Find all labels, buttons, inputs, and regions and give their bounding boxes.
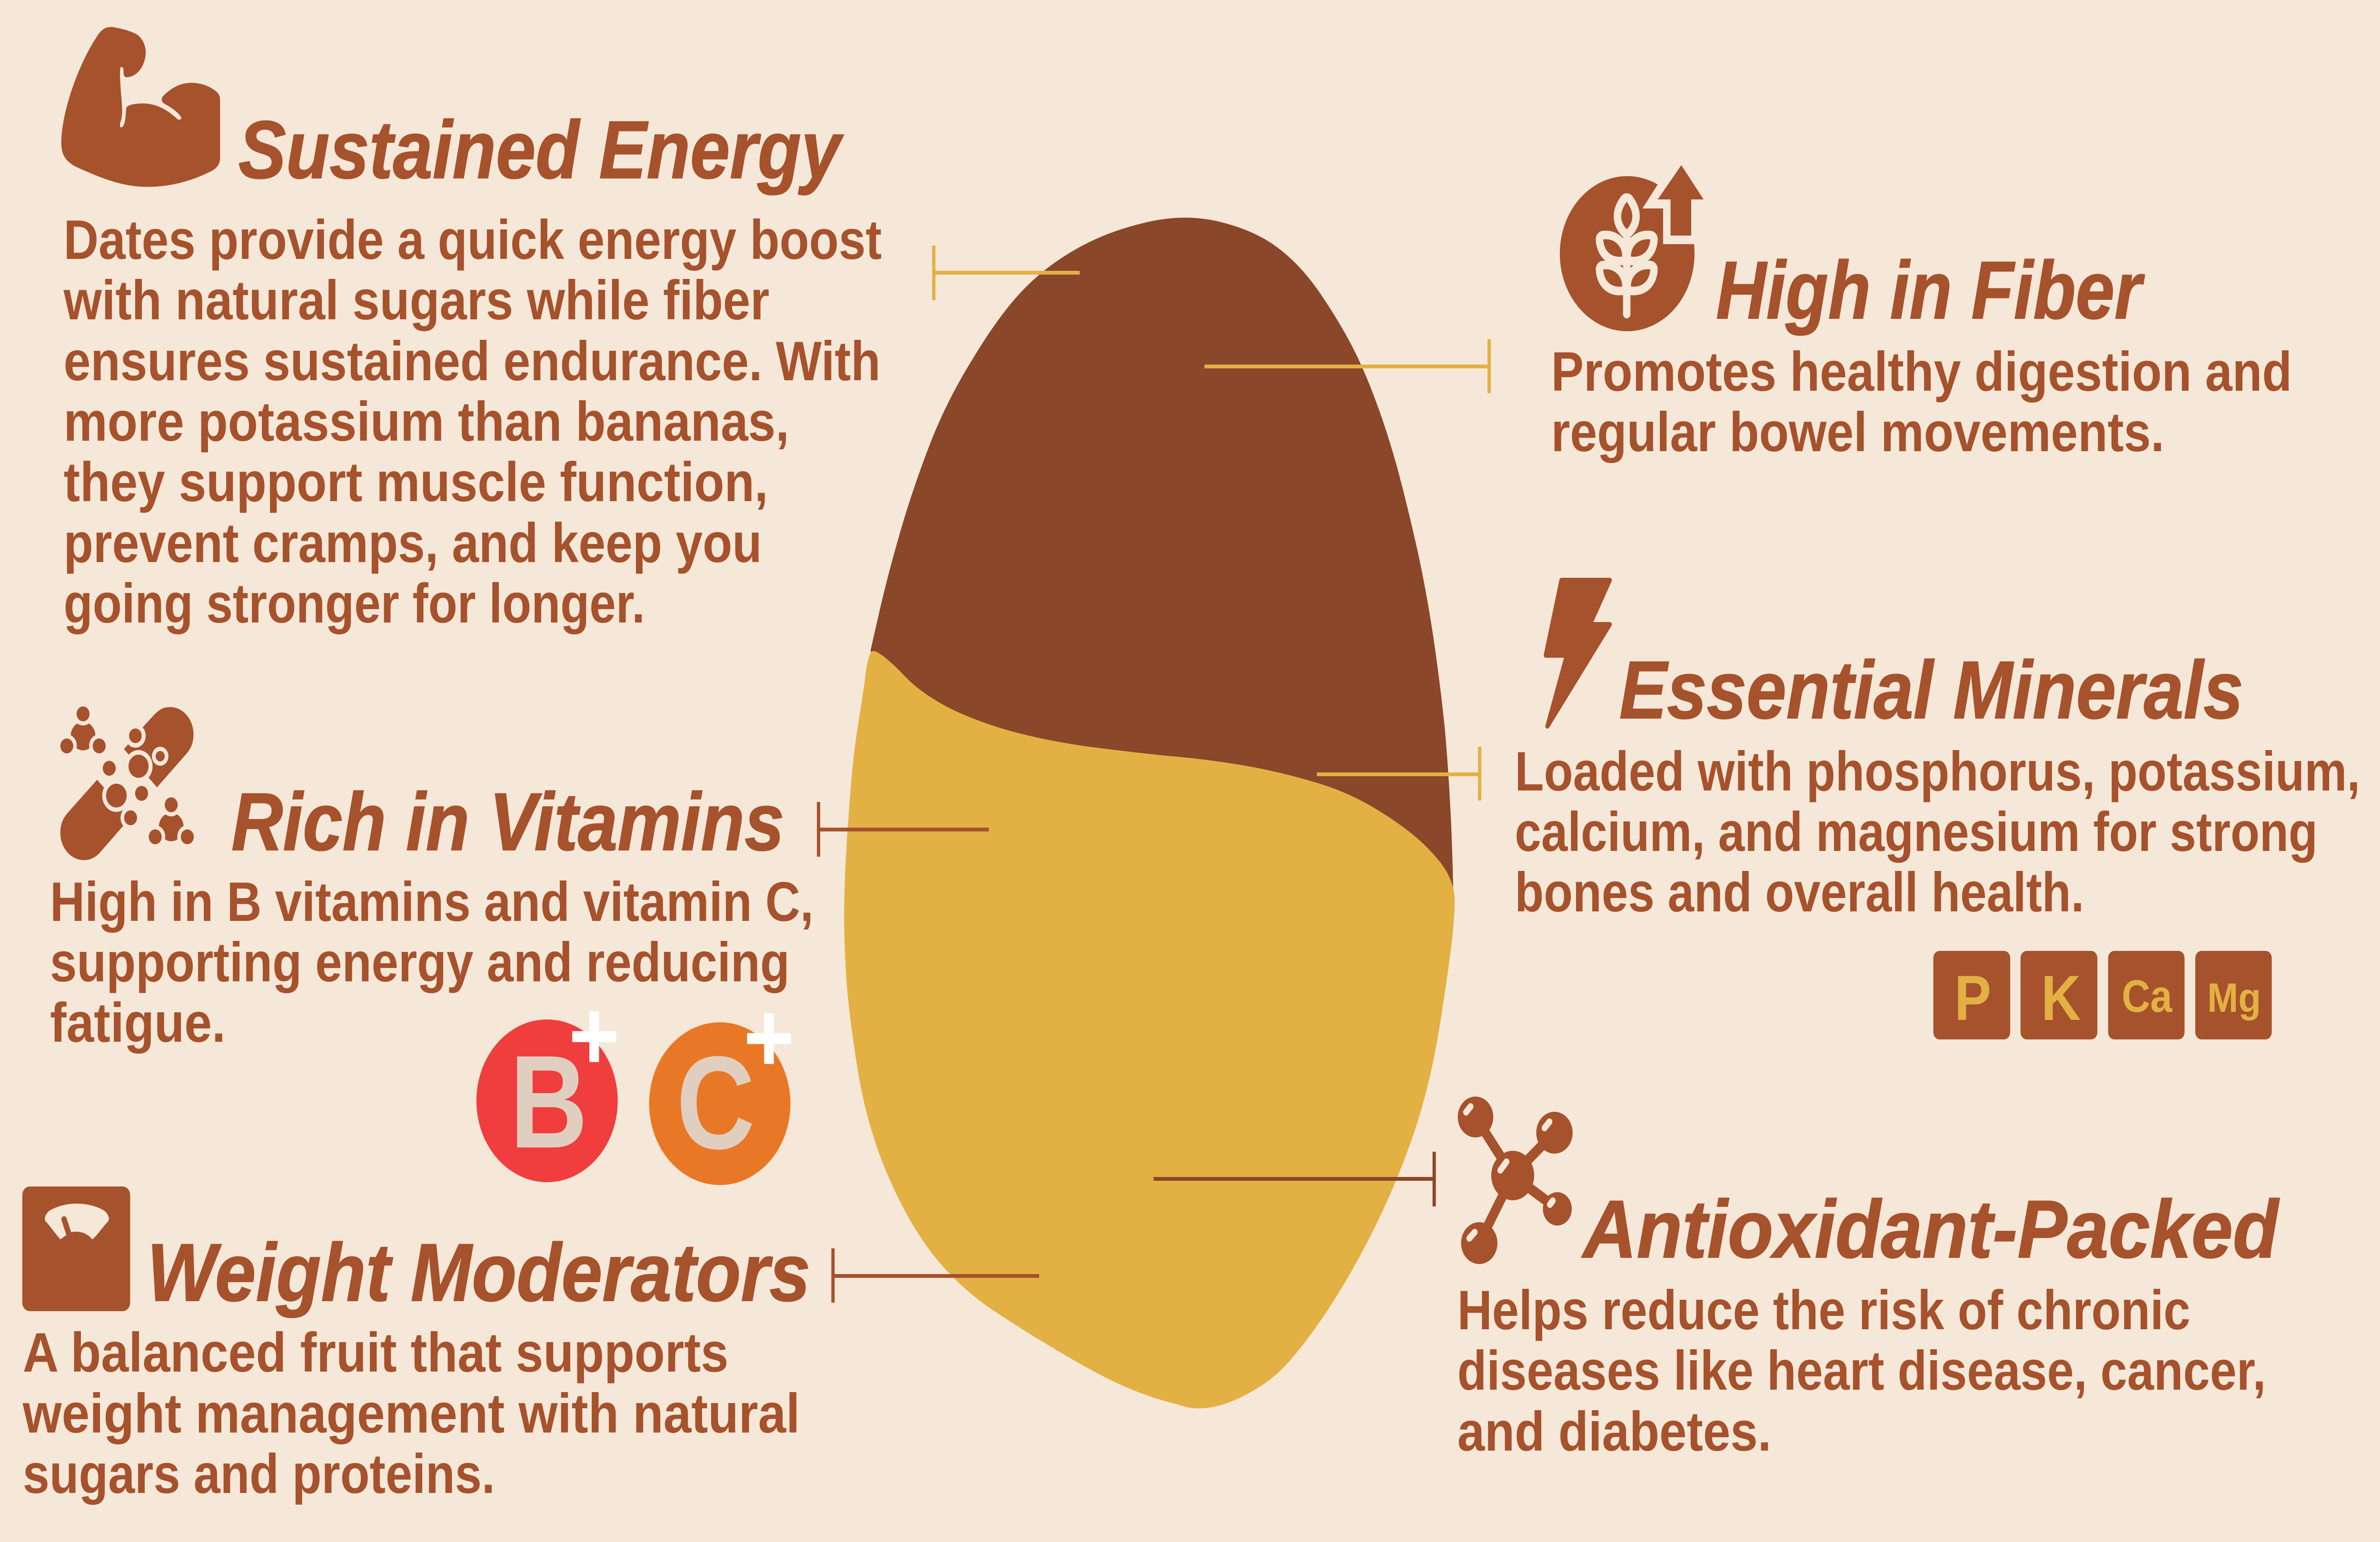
badge: vitamin C: + [742, 981, 793, 1093]
leader line: rich in vitamins [819, 802, 989, 857]
text block: rich in vitamins [50, 871, 813, 1054]
text block: rich in vitamins: fatigue. [50, 992, 226, 1054]
icon: wheat with up arrow [1560, 162, 1704, 331]
heading: rich in vitamins: Rich in Vitamins [231, 776, 784, 868]
badge: vitamin C [649, 981, 793, 1185]
text block: rich in vitamins: supporting energy and reducing [50, 931, 790, 994]
mineral badge: Mg: Mg [2207, 975, 2261, 1021]
leader line: weight moderators [833, 1248, 1039, 1303]
mineral badge: Ca: Ca [2122, 971, 2172, 1022]
text block: antioxidant-packed: diseases like heart disease, cancer, [1458, 1340, 2266, 1402]
icon: lightning bolt [1546, 580, 1610, 726]
heading: antioxidant-packed: Antioxidant-Packed [1581, 1184, 2280, 1275]
badge: vitamin B: B [510, 1028, 587, 1176]
heading: weight moderators: Weight Moderators [147, 1227, 810, 1318]
mineral badge: P [1934, 951, 2010, 1039]
date fruit illustration [844, 217, 1455, 1408]
panel: antioxidant-packed [1458, 1097, 2280, 1463]
text block: sustained energy: prevent cramps, and keep you [64, 512, 762, 574]
text block: high in fiber: Promotes healthy digestion and [1551, 341, 2292, 403]
leader line: high in fiber [1204, 339, 1489, 393]
text block: antioxidant-packed: Helps reduce the risk of chronic [1458, 1279, 2191, 1342]
panel: high in fiber [1551, 162, 2292, 464]
leader line: sustained energy [934, 246, 1080, 300]
text block: sustained energy [63, 209, 882, 635]
leader line: antioxidant-packed [1154, 1152, 1434, 1206]
mineral badge: K: K [2041, 962, 2081, 1034]
text block: rich in vitamins: High in B vitamins and vitamin C, [50, 871, 813, 933]
text block: sustained energy: Dates provide a quick energy boost [64, 209, 882, 271]
leader line: essential minerals [1317, 747, 1480, 801]
heading: high in fiber: High in Fiber [1716, 245, 2145, 336]
icon: flexed muscle [61, 27, 220, 187]
text block: sustained energy: they support muscle function, [64, 451, 768, 514]
mineral badge: P: P [1954, 962, 1991, 1034]
text block: antioxidant-packed [1458, 1279, 2266, 1463]
icon: capsule with bubbles [57, 702, 198, 860]
mineral badge: Mg [2195, 951, 2272, 1039]
badge: vitamin B [476, 979, 618, 1182]
mineral badge: K [2021, 951, 2097, 1039]
text block: high in fiber [1551, 341, 2292, 464]
text block: sustained energy: going stronger for longer. [64, 573, 645, 635]
heading: essential minerals: Essential Minerals [1619, 644, 2243, 736]
text block: essential minerals: Loaded with phosphorus, potassium, [1515, 741, 2360, 803]
text block: high in fiber: regular bowel movements. [1551, 401, 2164, 464]
text block: sustained energy: with natural sugars while fiber [63, 269, 769, 332]
text block: weight moderators: weight management with natural [22, 1383, 800, 1445]
icon: molecule [1458, 1097, 1573, 1264]
text block: sustained energy: more potassium than bananas, [64, 391, 789, 453]
panel: weight moderators [22, 1186, 810, 1505]
text block: essential minerals [1515, 741, 2360, 924]
mineral badge: Ca [2108, 951, 2184, 1039]
text block: essential minerals: bones and overall health. [1515, 861, 2084, 924]
icon: weighing scale [22, 1186, 130, 1311]
text block: antioxidant-packed: and diabetes. [1458, 1401, 1771, 1463]
text block: weight moderators: sugars and proteins. [23, 1443, 495, 1505]
badge: vitamin B: + [567, 979, 618, 1091]
text block: essential minerals: calcium, and magnesium for strong [1515, 801, 2318, 863]
badge: vitamin C: C [676, 1029, 755, 1177]
text block: sustained energy: ensures sustained endurance. With [64, 330, 881, 393]
text block: weight moderators: A balanced fruit that supports [23, 1322, 728, 1384]
panel: sustained energy [61, 27, 882, 635]
heading: sustained energy: Sustained Energy [238, 104, 844, 196]
panel: essential minerals [1515, 580, 2360, 1039]
text block: weight moderators [22, 1322, 800, 1505]
panel: rich in vitamins [50, 702, 813, 1185]
